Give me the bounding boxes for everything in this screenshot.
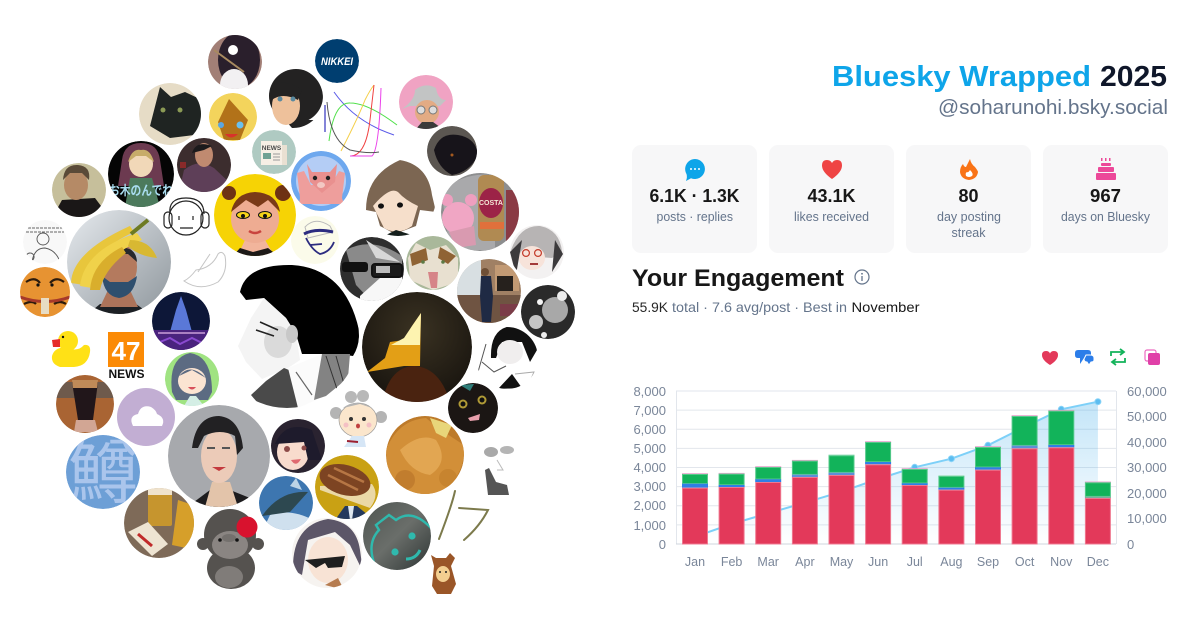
avatar: man with glasses in grayscale [340,237,404,302]
left axis labels [633,384,666,552]
right axis labels: 20,000 [1127,486,1167,501]
month labels: Jan [685,555,705,569]
bar: Nov [1048,410,1074,544]
avatar: pink pig on blue [291,151,351,211]
handle: @soharunohi.bsky.social [938,97,1168,119]
avatar: black pug [427,126,478,176]
chart: engagement per month [633,384,1167,569]
month labels: Sep [977,555,999,569]
engagement summary: 55.9K [632,299,669,315]
avatar: sketch girl with peace sign [476,326,538,389]
bar: Mar [755,466,781,544]
doodle: slash and seven strokes [439,491,488,540]
avatar: black cat with yellow eyes [448,383,498,433]
avatar: fried chicken [386,416,464,494]
stat card: days on Bluesky [1043,145,1168,253]
avatar: woman with black hair [269,69,323,128]
legend: heart [1042,351,1058,365]
stat card: day posting streak [906,145,1031,253]
bar: Oct [1012,415,1038,544]
avatar: man with banana hat [67,210,171,314]
month labels: Apr [795,555,815,569]
left axis labels: 7,000 [633,403,666,418]
avatar: character with bucket hat [399,75,453,130]
stat card: likes received [769,145,894,253]
avatar: teal robot logo [363,502,431,570]
avatar: gorilla with red flower [197,509,264,589]
left axis labels: 5,000 [633,441,666,456]
avatar: news icon: NEWS [262,145,282,152]
stat card: day posting streak: 80 [958,186,978,206]
avatar: bear costume character [431,553,456,594]
bar: Jan [682,473,708,544]
avatar: woman in a room [457,259,521,323]
engagement summary [632,299,920,315]
icon: birthday cake [1096,158,1116,180]
month labels: Oct [1015,555,1035,569]
right axis labels: 30,000 [1127,460,1167,475]
avatar: anime girl with dark purple hair [271,419,325,473]
right axis labels: 40,000 [1127,435,1167,450]
avatar: yellow rubber duck [52,331,90,367]
avatar: tiger bread [20,267,70,317]
avatar: man with dark shirt [52,163,110,218]
engagement summary: November [852,299,920,315]
right axis labels: 60,000 [1127,384,1167,399]
right axis labels: 50,000 [1127,409,1167,424]
logo: 47 NEWS [108,332,144,381]
avatar: hooded anime girl [108,141,174,207]
month labels: Mar [757,555,779,569]
icon: chat bubble [685,159,705,181]
left axis labels: 4,000 [633,460,666,475]
avatar: manga sketch [26,228,64,260]
avatar: coloured graph curves [325,85,397,156]
avatar: castle at night [152,292,210,350]
left axis labels: 2,000 [633,498,666,513]
icon: info [855,270,869,284]
right axis labels [1127,384,1167,552]
avatar: old man sketch on cream [291,216,339,264]
legend: quotes [1145,350,1160,365]
avatar: sunglasses and finger sketch [484,446,514,495]
avatar: pink bear and Costa bottle: COSTA [479,200,503,207]
month labels: May [830,555,854,569]
avatar: girl with yellow background [214,174,296,257]
avatar: tower at night [362,292,472,402]
avatar: bird over water [259,476,313,532]
right axis labels: 10,000 [1127,511,1167,526]
month labels: Feb [721,555,742,569]
avatar: smiling cloud on purple [117,388,175,446]
month labels [685,555,1109,569]
avatar: blue kanji: 鱒 [68,417,138,518]
bar: Aug [938,475,964,544]
bar: Feb [719,473,745,544]
avatar: pie-headed figure on mustard [315,455,379,520]
avatar: Nikkei logo [315,39,359,83]
title: Bluesky Wrapped [832,61,1091,93]
avatar: yellow cartoon cat [209,93,257,141]
bar: Jul [902,468,928,544]
avatar: dove sketch [184,252,226,287]
left axis labels: 3,000 [633,479,666,494]
avatar: silver haired girl with glasses [510,225,564,279]
bar: May [828,454,854,544]
stat card: day posting streak: streak [952,225,986,240]
bar: Apr [792,460,818,544]
month labels: Aug [940,555,963,569]
avatar: grandmother drawing [330,390,387,447]
avatar: Nikkei logo: NIKKEI [321,56,354,68]
bar: Sep [975,446,1001,544]
avatar: dark beer glass [56,375,114,433]
icon: flame [960,159,978,180]
avatar: cat with tongue [406,236,460,290]
stat card: likes received: 43.1K [808,186,856,206]
logo: 47 NEWS: NEWS [108,367,144,381]
stat card: posts and replies: posts · replies [656,209,733,224]
month labels: Jul [907,555,923,569]
stat card: posts and replies: 6.1K · 1.3K [650,186,740,206]
icon: heart [822,160,842,179]
month labels: Nov [1050,555,1073,569]
left axis labels: 6,000 [633,422,666,437]
stat card: days on Bluesky: days on Bluesky [1061,209,1150,224]
cumulative area and line [695,399,1101,544]
avatar: monochrome flowers [521,285,575,339]
avatar: pink bear and Costa bottle [441,173,522,251]
avatar: anime girl on green [165,352,219,406]
stat card: posts and replies [632,145,757,253]
bar: Jun [865,441,891,544]
avatar: hooded anime girl: お木のんでね [109,183,173,198]
avatar: beer glasses [124,488,196,558]
legend: replies [1075,350,1094,365]
logo: 47 NEWS: 47 [112,336,140,366]
right axis labels: 0 [1127,537,1134,552]
month labels: Dec [1087,555,1109,569]
chart grid [676,391,1116,544]
title: 2025 [1100,61,1167,93]
heading: Your Engagement: Your Engagement [632,265,844,292]
stat card: days on Bluesky: 967 [1090,186,1121,206]
avatar: anime woman with sunglasses [292,518,363,590]
legend: reposts [1111,349,1125,365]
avatar: news icon [252,130,296,174]
stat card: likes received: likes received [794,209,869,224]
avatar: penguin [208,35,262,89]
left axis labels: 1,000 [633,518,666,533]
avatar: large manga girl with black hair [238,265,359,408]
avatar: man in purple hoodie [177,138,232,195]
avatar: brown haired chibi [366,160,436,236]
bar: Dec [1085,482,1111,544]
engagement summary: total · 7.6 avg/post · Best in [672,299,847,315]
avatar: headphones doodle [164,198,209,235]
avatar: black cat [139,83,202,145]
month labels: Jun [868,555,888,569]
left axis labels: 0 [659,537,666,552]
left axis labels: 8,000 [633,384,666,399]
avatar: woman portrait on gray [168,405,270,507]
stat card: day posting streak: day posting [937,209,1001,224]
